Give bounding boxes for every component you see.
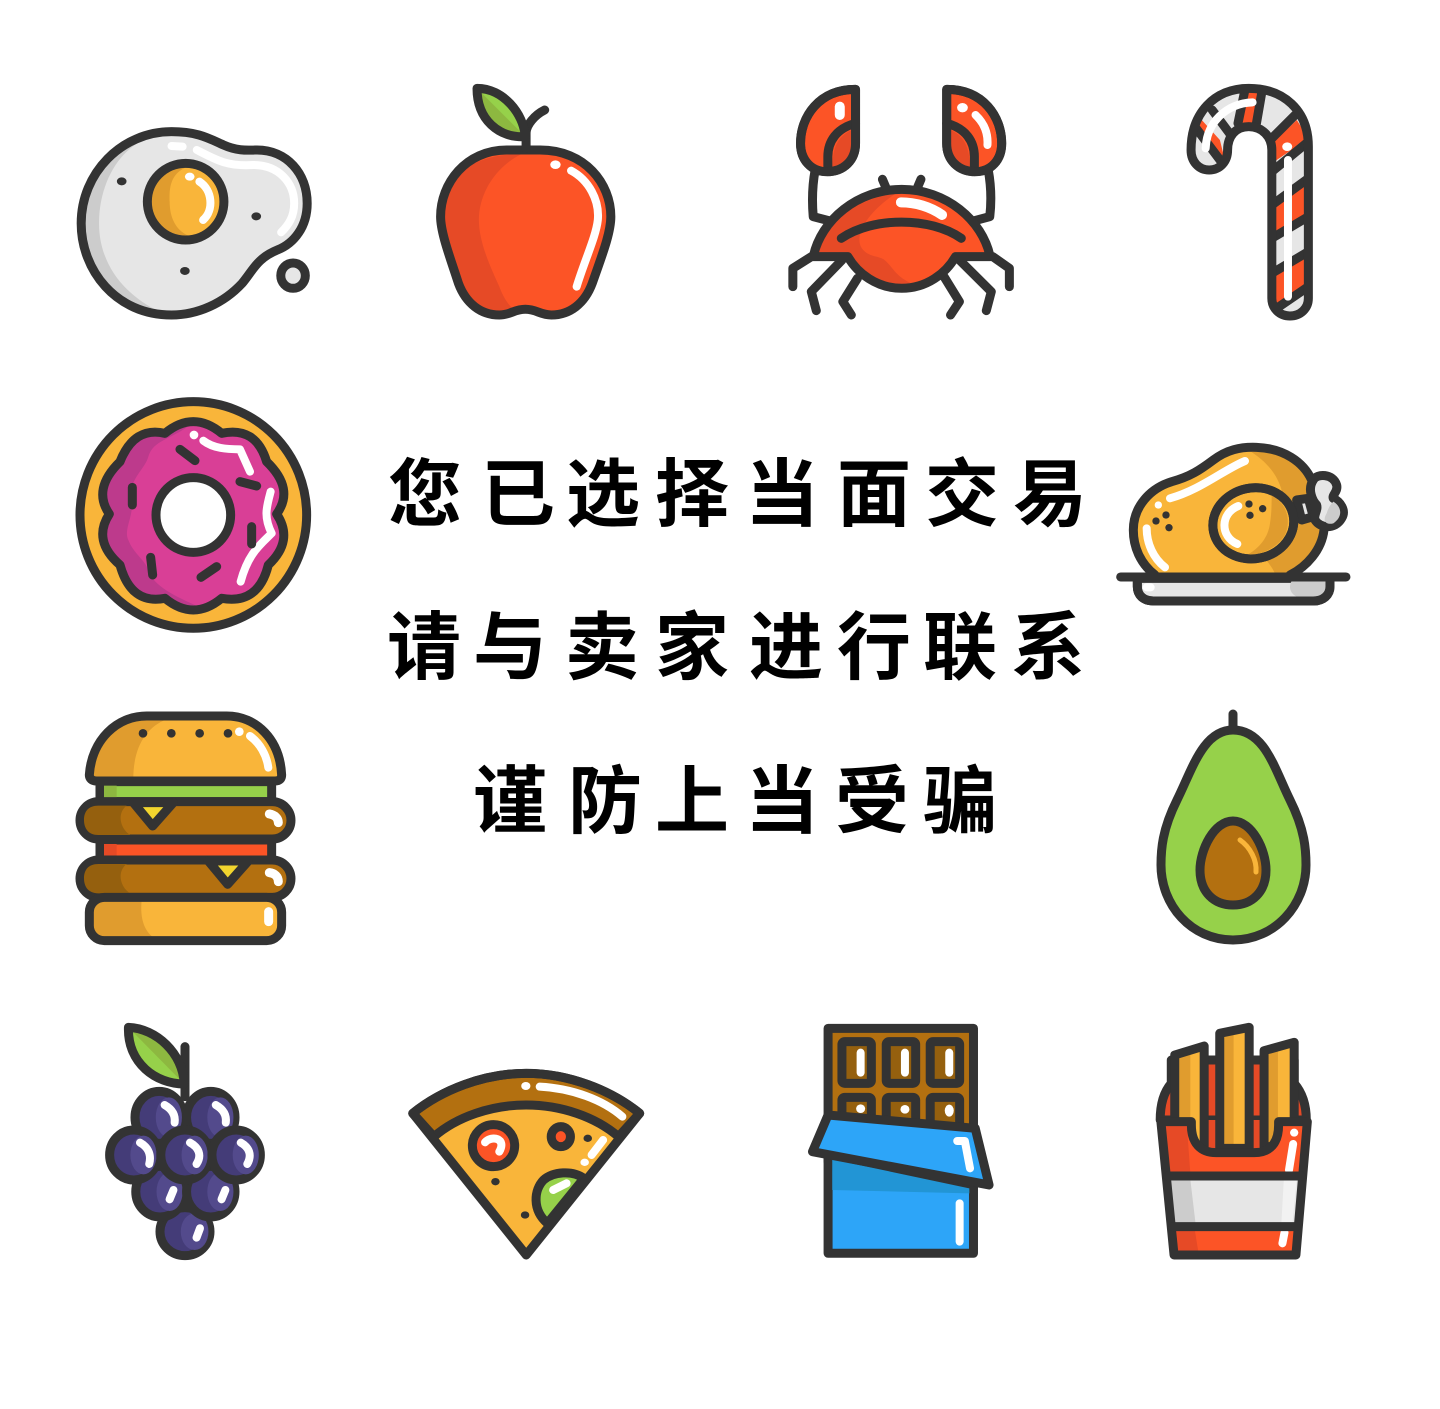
- icon: apple: [441, 88, 611, 315]
- icon: pizza slice: [413, 1073, 640, 1255]
- icon: french fries: [1160, 1027, 1307, 1255]
- icon: avocado: [1161, 714, 1306, 940]
- icon: grapes: [110, 1027, 260, 1256]
- text: notice line 2: 请与卖家进行联系: [387, 606, 1085, 689]
- icon: donut: [80, 402, 307, 628]
- icon: candy cane: [1191, 87, 1308, 316]
- icon: chocolate bar: [813, 1028, 989, 1253]
- food icons and notice illustration: [76, 84, 1350, 1260]
- icon: burger: [80, 716, 291, 941]
- text: notice line 1: 您已选择当面交易: [388, 453, 1087, 536]
- icon: roast chicken: [1121, 447, 1346, 601]
- icon: crab: [793, 89, 1009, 315]
- icon: fried egg: [81, 132, 307, 315]
- text: notice line 3: 谨防上当受骗: [473, 760, 997, 843]
